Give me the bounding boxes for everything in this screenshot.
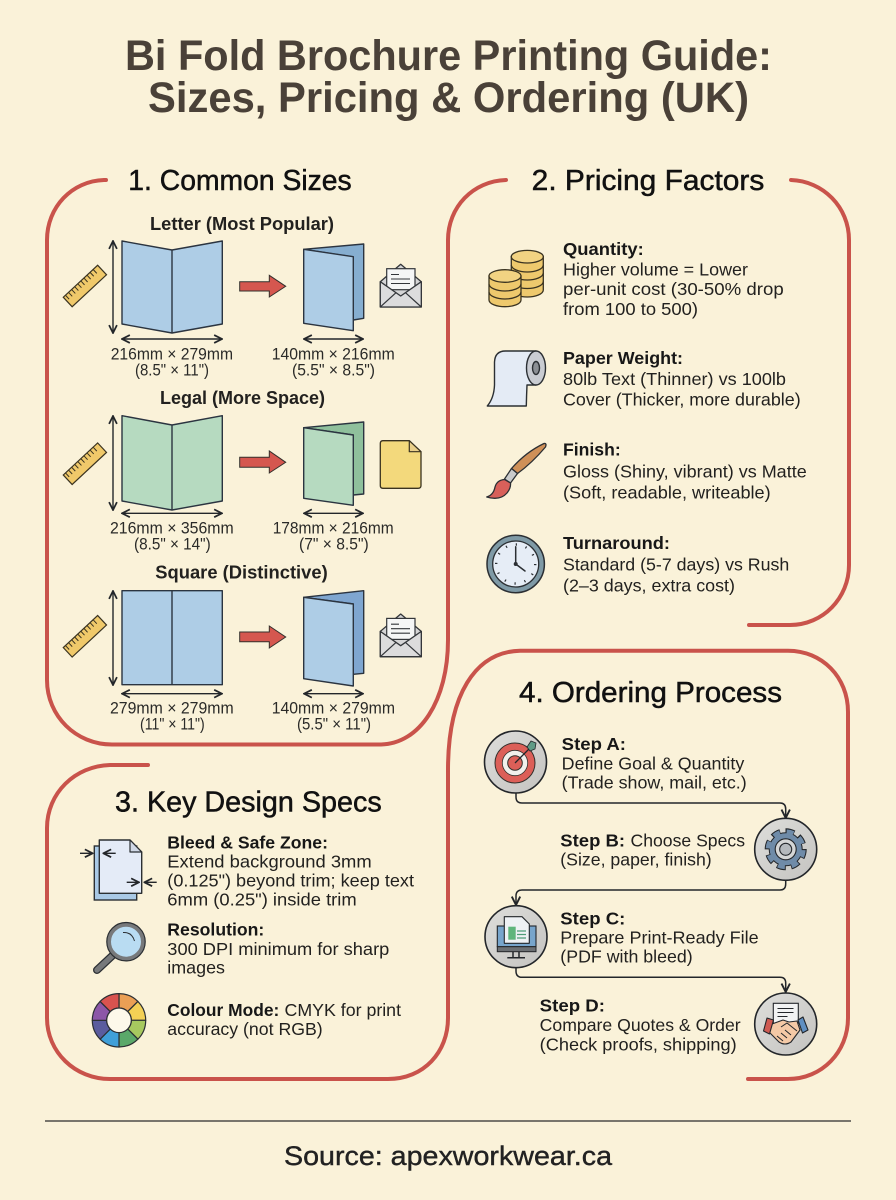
folded brochure: square (304, 591, 364, 694)
dimensions: legal open (110, 519, 234, 554)
dimensions: square folded (272, 699, 395, 734)
text: resolution (167, 920, 389, 977)
text: step C: (PDF with bleed) (560, 946, 693, 966)
arrow: letter fold (240, 275, 286, 297)
text: bleed and safe zone (167, 832, 414, 909)
heading: ordering process: 4. Ordering Process (519, 677, 782, 709)
text: colour mode (167, 1000, 401, 1039)
icon: envelope square (380, 614, 421, 657)
text: turnaround: Standard (5-7 days) vs Rush (563, 555, 789, 575)
dimensions: letter open (111, 345, 233, 380)
text: quantity: Higher volume = Lower (563, 259, 748, 279)
dimensions: square folded: (5.5" × 11") (297, 716, 371, 734)
icon: magnifying glass (97, 922, 145, 970)
title: Bi Fold Brochure Printing Guide: (125, 32, 772, 80)
text: finish: (Soft, readable, writeable) (563, 482, 771, 502)
text: step D (540, 996, 741, 1055)
panel: pricing factors (487, 165, 849, 625)
text: paper weight: 80lb Text (Thinner) vs 100lb (563, 369, 786, 389)
panel border: ordering process (448, 651, 848, 1079)
text: step B: (Size, paper, finish) (560, 850, 712, 870)
text: bleed and safe zone: 6mm (0.25") inside trim (167, 889, 357, 909)
icon: clock (487, 535, 544, 593)
icon: ruler square (63, 616, 107, 657)
dimensions: letter folded: (5.5" × 8.5") (292, 362, 375, 380)
dimensions: square folded: 140mm × 279mm (272, 699, 395, 717)
text: colour mode: Colour Mode: (167, 1000, 279, 1020)
icon: gear (755, 818, 817, 880)
dimensions: legal folded: (7" × 8.5") (299, 536, 369, 554)
sub-heading: legal: Legal (More Space) (160, 388, 325, 408)
text: colour mode: CMYK for print (284, 1000, 401, 1020)
text: step D: Step D: (540, 996, 605, 1016)
icon: paper roll (487, 351, 546, 406)
text: step A: Define Goal & Quantity (562, 753, 745, 773)
icon: coin stacks (489, 250, 543, 307)
dimensions: letter open: (8.5" × 11") (135, 362, 209, 380)
heading: pricing factors: 2. Pricing Factors (532, 165, 764, 197)
text: turnaround (563, 533, 789, 596)
text: step A (562, 734, 747, 792)
text: colour mode: accuracy (not RGB) (167, 1019, 323, 1039)
icon: yellow document (380, 441, 421, 488)
dimensions: legal open: 216mm × 356mm (110, 519, 234, 537)
folded brochure: legal (304, 422, 364, 513)
arrow: legal fold (240, 451, 286, 473)
text: finish: Gloss (Shiny, vibrant) vs Matte (563, 462, 807, 482)
icon: colour wheel (92, 994, 146, 1047)
text: step B (560, 831, 745, 870)
text: step B: Step B: (560, 831, 625, 851)
connector: C to D (516, 968, 786, 992)
panel border: pricing factors (749, 180, 849, 625)
text: step B: Choose Specs (630, 831, 745, 851)
icon: envelope letter (380, 264, 421, 307)
icon: ruler letter (63, 265, 107, 307)
heading: key design specs: 3. Key Design Specs (115, 787, 382, 819)
icon: target (484, 731, 546, 793)
sub-heading: letter: Letter (Most Popular) (150, 214, 334, 234)
arrow: square fold (240, 626, 286, 648)
text: quantity: Quantity: (563, 239, 644, 259)
text: step C: Step C: (560, 908, 625, 928)
text: step C (560, 908, 759, 966)
dimensions: letter folded (272, 345, 395, 380)
text: turnaround: Turnaround: (563, 533, 670, 553)
text: quantity (563, 239, 784, 319)
icon: paint brush (487, 443, 546, 498)
dimensions: square open: (11" × 11") (140, 716, 205, 734)
text: quantity: from 100 to 500) (563, 299, 698, 319)
text: step C: Prepare Print-Ready File (560, 927, 759, 947)
panel: common sizes (47, 165, 506, 744)
sub-heading: square: Square (Distinctive) (155, 562, 328, 582)
open brochure: square (113, 591, 222, 694)
dimensions: square open: 279mm × 279mm (110, 699, 234, 717)
text: quantity: per-unit cost (30-50% drop (563, 279, 784, 299)
dimensions: letter open: 216mm × 279mm (111, 345, 233, 363)
panel: key design specs (47, 765, 448, 1079)
title (125, 32, 772, 122)
text: resolution: Resolution: (167, 920, 264, 940)
folded brochure: letter (304, 244, 364, 339)
dimensions: legal folded: 178mm × 216mm (273, 519, 394, 537)
connector: A to B (516, 793, 786, 818)
panel border: common sizes (47, 180, 506, 744)
dimensions: letter folded: 140mm × 216mm (272, 345, 395, 363)
text: paper weight: Cover (Thicker, more durable) (563, 390, 801, 410)
open brochure: letter (113, 241, 222, 339)
dimensions: legal folded (273, 519, 394, 554)
text: step D: (Check proofs, shipping) (540, 1035, 737, 1055)
text: finish: Finish: (563, 440, 621, 460)
dimensions: legal open: (8.5" × 14") (134, 536, 211, 554)
heading: common sizes: 1. Common Sizes (128, 165, 352, 197)
text: step D: Compare Quotes & Order (540, 1015, 741, 1035)
text: resolution: images (167, 957, 225, 977)
text: resolution: 300 DPI minimum for sharp (167, 939, 389, 959)
text: finish (563, 440, 807, 502)
text: paper weight: Paper Weight: (563, 348, 683, 368)
panel border: key design specs (47, 765, 448, 1079)
open brochure: legal (113, 416, 222, 513)
dimensions: square open (110, 699, 234, 734)
icon: ruler legal (63, 443, 107, 484)
connector: B to C (516, 880, 786, 905)
icon: monitor with file (485, 906, 547, 968)
title: Sizes, Pricing & Ordering (UK) (148, 74, 749, 122)
text: step A: (Trade show, mail, etc.) (562, 772, 747, 792)
panel: ordering process (448, 651, 848, 1079)
text: bleed and safe zone: Bleed & Safe Zone: (167, 832, 328, 852)
text: step A: Step A: (562, 734, 626, 754)
footer source: Source: apexworkwear.ca (284, 1141, 613, 1171)
text: turnaround: (2–3 days, extra cost) (563, 576, 735, 596)
text: bleed and safe zone: (0.125") beyond trim; keep text (167, 871, 414, 891)
text: bleed and safe zone: Extend background 3mm (167, 851, 372, 871)
icon: bleed document (80, 840, 157, 900)
text: paper weight (563, 348, 801, 410)
icon: handshake (755, 993, 817, 1055)
